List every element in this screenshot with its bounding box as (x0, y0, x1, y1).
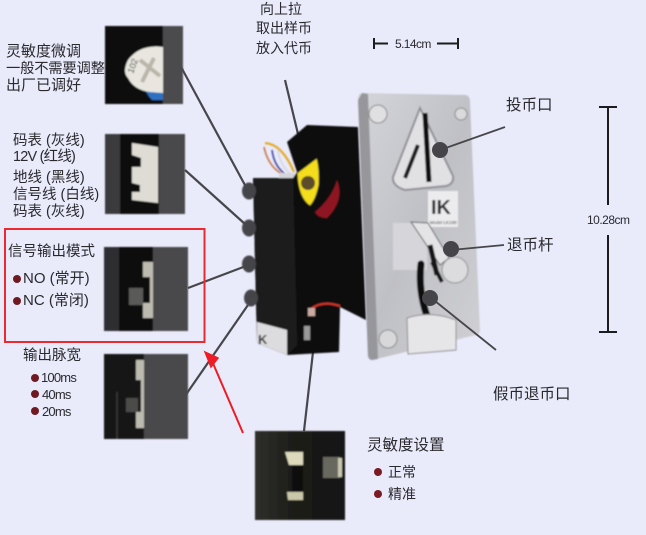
text: trimmer note: 一般不需要调整 (6, 60, 105, 77)
text: wire colours: 信号线 (白线) (13, 186, 99, 203)
text: pull up note: 取出样币 (256, 20, 312, 36)
text: output pulse width: 40ms (42, 387, 72, 402)
housing silhouette (253, 125, 366, 355)
photo: sensitivity switch (255, 431, 345, 520)
plate callout dots (422, 142, 459, 306)
dimension: width: 5.14cm (395, 37, 431, 51)
text: sensitivity setting: 精准 (388, 486, 416, 502)
yellow cam (297, 158, 319, 206)
return lever (411, 222, 468, 283)
photo: output switch (104, 247, 188, 331)
text: wire colours (13, 132, 99, 220)
panel: signal output mode (5, 229, 204, 342)
label: return lever: 退币杆 (507, 236, 554, 254)
text: wire colours: 地线 (黑线) (13, 169, 85, 186)
text: wire colours: 12V (红线) (13, 148, 75, 165)
arrow: red pointer (205, 352, 243, 433)
text: output pulse width: 输出脉宽 (23, 347, 81, 364)
white connector (279, 173, 295, 179)
red lever (315, 180, 339, 218)
text: sensitivity setting (367, 436, 445, 502)
return slot (420, 264, 427, 316)
text: output pulse width (23, 347, 81, 419)
housing logo: K (258, 332, 268, 347)
option: NC: NC (常闭) (23, 292, 89, 309)
wires (264, 143, 294, 174)
text: pull up note: 放入代币 (256, 40, 312, 56)
coin slot (393, 108, 453, 190)
dimension: height: 10.28cm (587, 213, 630, 227)
text: wire colours: 码表 (灰线) (13, 203, 85, 220)
brand label: Model LK100 (430, 220, 457, 225)
label: coin slot: 投币口 (506, 96, 553, 114)
side knobs (242, 182, 258, 306)
photo: sensitivity trimmer (105, 26, 183, 104)
text: sensitivity setting: 正常 (388, 464, 416, 480)
leader lines: left and centre (180, 65, 313, 431)
option: NO: NO (常开) (23, 270, 90, 287)
heading: signal output mode: 信号输出模式 (8, 243, 95, 260)
chrome face plate (358, 93, 480, 360)
text: sensitivity setting: 灵敏度设置 (367, 436, 445, 454)
leader lines: plate callouts (430, 127, 505, 350)
text: pull up note: 向上拉 (260, 1, 302, 17)
text: trimmer note (6, 43, 105, 94)
dimension: height (587, 107, 630, 332)
trimmer code: 102 (125, 57, 140, 75)
text: wire colours: 码表 (灰线) (13, 132, 85, 149)
brand label: IK (431, 197, 452, 219)
text: pull up note (256, 1, 312, 56)
text: trimmer note: 出厂已调好 (6, 77, 81, 94)
rating label (257, 322, 287, 355)
label: fake coin return: 假币退币口 (493, 385, 571, 403)
text: trimmer note: 灵敏度微调 (6, 43, 81, 60)
photo: pulse width switch (104, 354, 188, 439)
coin mechanism (242, 125, 366, 355)
photo: wire connector (105, 134, 185, 214)
brand label (428, 191, 458, 227)
screws (369, 105, 387, 123)
dimension: width (374, 37, 458, 51)
text: output pulse width: 100ms (41, 370, 77, 385)
front block face (253, 178, 297, 355)
text: output pulse width: 20ms (42, 404, 72, 419)
